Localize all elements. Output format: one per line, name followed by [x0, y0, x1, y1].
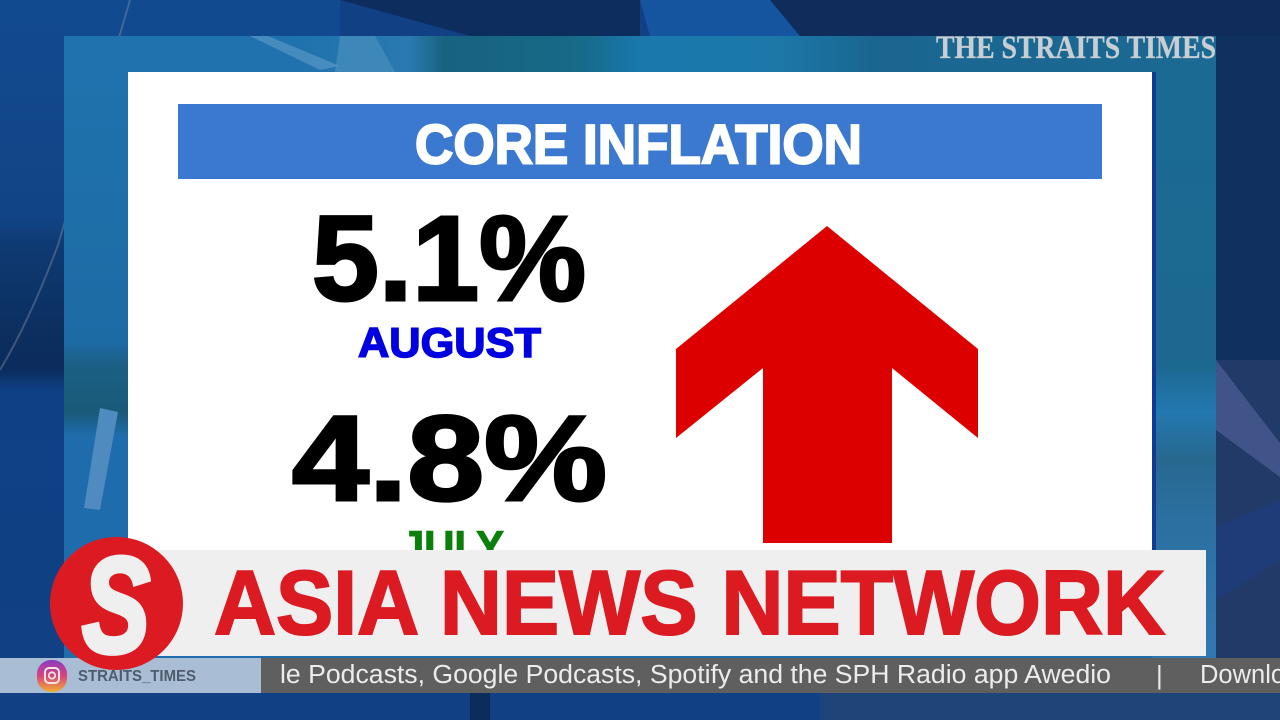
arrow: red up arrow — [676, 226, 978, 543]
logo: S roundel: S — [82, 529, 150, 681]
heading band: core inflation: CORE INFLATION — [415, 112, 862, 176]
stat: August 5.1%: AUGUST — [358, 319, 541, 366]
stat: July 4.8%: JULY — [401, 522, 504, 569]
banner: Asia News Network: ASIA NEWS NETWORK — [214, 553, 1165, 654]
heading band: core inflation — [178, 104, 1102, 179]
logo: The Straits Times: THE STRAITS TIMES — [936, 30, 1216, 66]
ticker bar — [0, 658, 1280, 693]
ticker text: | — [1156, 660, 1163, 690]
teal overlay panel — [64, 36, 1216, 658]
panel: white card — [128, 72, 1156, 569]
stat: July 4.8% — [292, 414, 606, 550]
logo: S roundel — [50, 529, 183, 681]
stat: August 5.1%: 5.1% — [312, 190, 586, 326]
icon: instagram — [37, 660, 67, 692]
stat: July 4.8%: 4.8% — [292, 390, 607, 526]
instagram handle: STRAITS_TIMES — [78, 668, 196, 685]
ticker text: le Podcasts, Google Podcasts, Spotify and the SPH Radio app Awedio — [280, 661, 1111, 689]
